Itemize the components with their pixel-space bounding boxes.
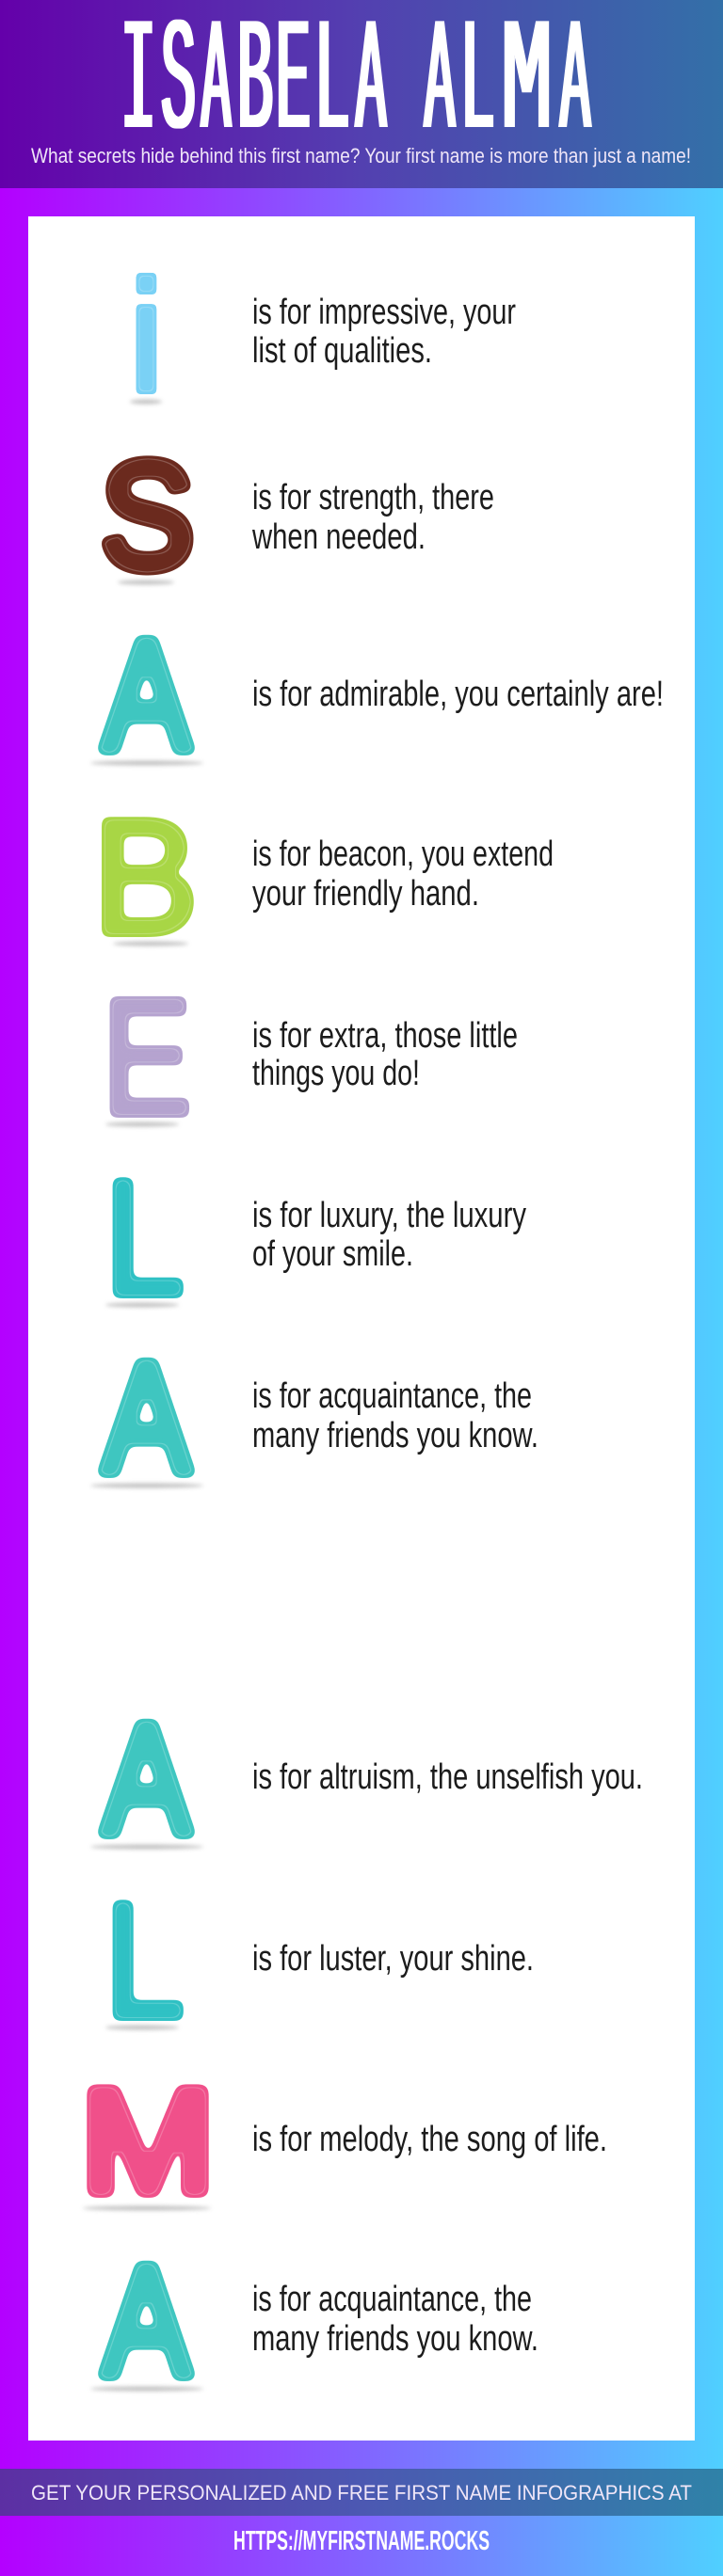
text: luxury: [252, 1196, 526, 1274]
icon: letter E: E: [102, 965, 192, 1150]
row: S: [101, 431, 494, 599]
icon: letter B: B: [92, 785, 199, 968]
text: extra: things you do!: [252, 1054, 420, 1093]
text: acquaintance: is for acquaintance, the: [252, 1376, 532, 1416]
row: A (altruism): [90, 1693, 643, 1867]
text: luster: is for luster, your shine.: [252, 1939, 534, 1979]
text: impressive: is for impressive, your: [252, 293, 516, 332]
row: B: [92, 785, 554, 968]
white card panel: [28, 216, 695, 2441]
header band: [0, 0, 723, 188]
text: melody: is for melody, the song of life.: [252, 2120, 607, 2159]
footer band: [0, 2469, 723, 2516]
text: acquaintance: [252, 2280, 538, 2359]
text: impressive: list of qualities.: [252, 331, 432, 371]
text: beacon: [252, 835, 554, 914]
text: extra: is for extra, those little: [252, 1016, 518, 1056]
footer url: HTTPS://MYFIRSTNAME.ROCKS: [233, 2526, 490, 2556]
row: L (luster): [104, 1868, 534, 2051]
row: E: [102, 965, 518, 1150]
text: strength: [251, 478, 494, 557]
row: M: [81, 2059, 607, 2222]
row: A (acquaintance, last): [90, 2234, 538, 2409]
icon: letter S: S: [101, 431, 194, 599]
icon: letter L: L: [104, 1146, 185, 1328]
text: acquaintance: is for acquaintance, the: [252, 2280, 532, 2319]
icon: letter M: M: [81, 2059, 215, 2222]
row: A (admirable): [90, 609, 664, 783]
text: beacon: your friendly hand.: [252, 874, 479, 914]
icon: letter A: A: [103, 1331, 190, 1505]
icon: letter A: A: [103, 1693, 190, 1867]
text: strength: is for strength, there: [252, 478, 494, 517]
text: extra: [252, 1016, 518, 1093]
text: beacon: is for beacon, you extend: [252, 835, 554, 874]
text: acquaintance: many friends you know.: [252, 1416, 538, 1455]
title: [120, 0, 590, 176]
icon: letter L: L: [104, 1868, 185, 2051]
text: impressive: [252, 293, 516, 371]
text: luxury: of your smile.: [252, 1234, 413, 1274]
text: luxury: is for luxury, the luxury: [252, 1196, 526, 1235]
row: I: [130, 247, 516, 426]
text: strength: when needed.: [251, 517, 426, 557]
icon: letter A: A: [103, 609, 190, 783]
icon: letter I: i: [130, 247, 163, 426]
text: acquaintance: many friends you know.: [252, 2319, 538, 2359]
text: acquaintance: [252, 1376, 538, 1455]
row: L (luxury): [104, 1146, 526, 1328]
icon: letter A: A: [103, 2234, 190, 2409]
row: A (acquaintance): [90, 1331, 538, 1505]
footer call to action: GET YOUR PERSONALIZED AND FREE FIRST NAME INFOGRAPHICS AT: [31, 2481, 692, 2504]
